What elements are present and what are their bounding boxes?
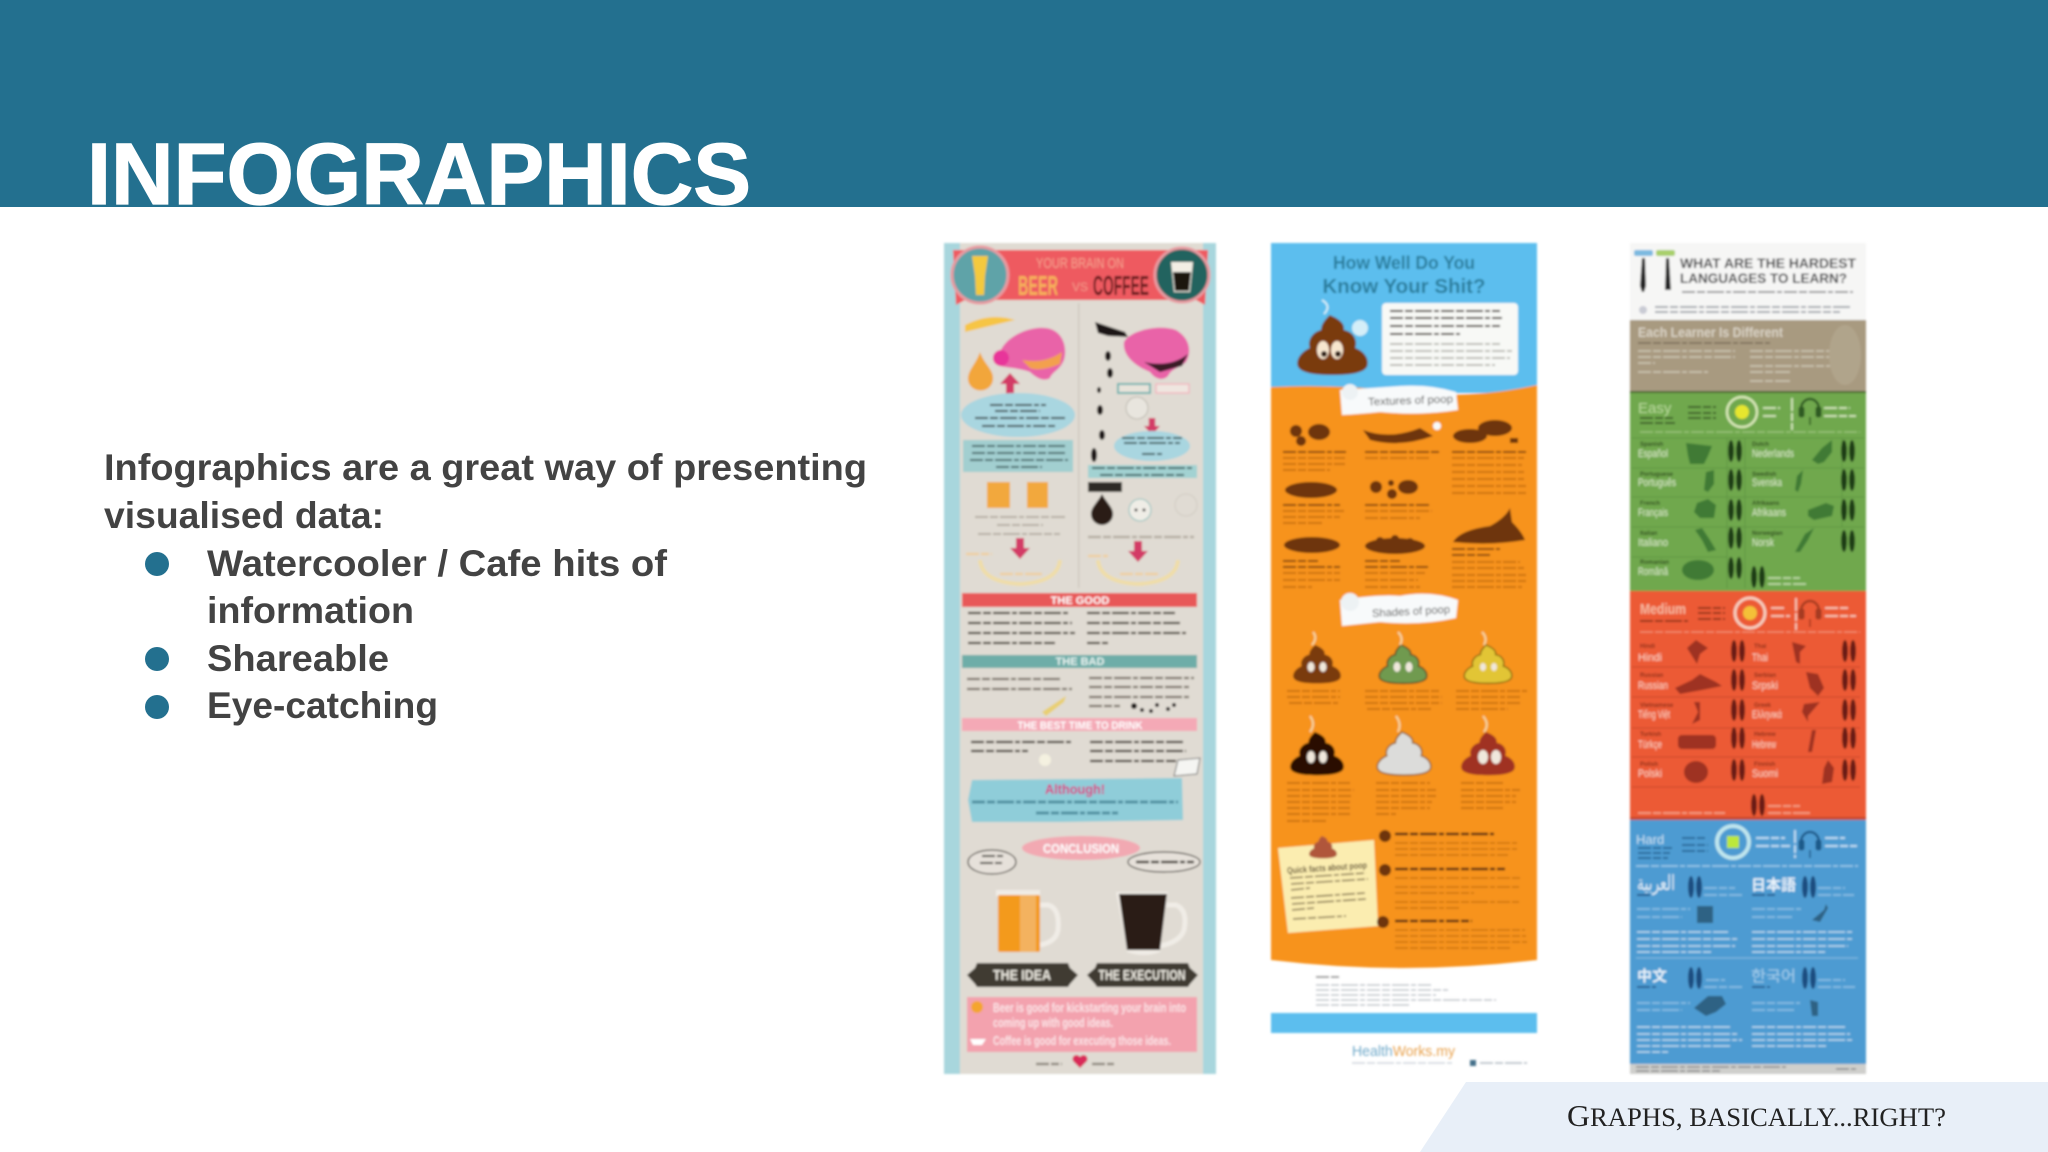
- medium rows: Ελληνικά: [1752, 709, 1782, 721]
- texture captions: [1283, 452, 1527, 587]
- medium rows: Thai: [1754, 644, 1767, 650]
- coffee side: drop, face and result: [1088, 482, 1197, 584]
- medium rows: Turkish: [1640, 732, 1662, 738]
- easy rows: Português: [1638, 477, 1676, 489]
- beer side: mugs and result: [966, 482, 1065, 584]
- credit strip: [1630, 1064, 1866, 1074]
- medium rows: Russian: [1640, 673, 1664, 679]
- sources: [1316, 977, 1496, 1005]
- japanese: [1751, 874, 1854, 952]
- medium rows: Hindi: [1638, 652, 1662, 664]
- easy rows: French: [1640, 501, 1660, 507]
- textures grid: [1284, 420, 1525, 554]
- easy rows: Norwegian: [1752, 531, 1783, 537]
- easy header: [1638, 397, 1860, 432]
- text block: intro and bullet list: [104, 447, 867, 726]
- easy rows: Dutch: [1752, 442, 1769, 448]
- texture row 3: [1284, 508, 1525, 554]
- icon: big poop mascot: [1297, 300, 1368, 375]
- title: INFOGRAPHICS: [87, 126, 751, 223]
- medium header: Medium: [1640, 601, 1686, 618]
- korean: [1751, 965, 1855, 1046]
- conclusion panel: Beer is good for kickstarting your brain into: [993, 1000, 1186, 1015]
- speech bubble: beer: [968, 850, 1016, 874]
- chinese: 中文: [1637, 965, 1667, 986]
- easy rows: [1632, 438, 1864, 588]
- medium rows: Serbian: [1754, 673, 1776, 679]
- coffee side: brain and drips: [1091, 322, 1189, 462]
- section: the bad: THE BAD: [1056, 656, 1104, 668]
- title: [1322, 253, 1486, 298]
- icons: header people: [1634, 250, 1675, 292]
- panel: hardest languages infographic: [1630, 243, 1866, 1074]
- banner: your brain on beer vs coffee: BEER: [1018, 270, 1058, 301]
- panel: know your shit infographic: [1271, 243, 1537, 1066]
- hard header: Hard: [1636, 832, 1664, 847]
- heading: shades of poop: Shades of poop: [1372, 604, 1450, 620]
- hard header: [1636, 826, 1858, 866]
- logo: healthworks.my: HealthWorks.my: [1352, 1043, 1455, 1060]
- medium header: [1640, 598, 1860, 632]
- section: each learner is different: Each Learner Is Different: [1638, 324, 1783, 340]
- intro sentence: [104, 447, 867, 536]
- japanese: 日本語: [1751, 874, 1796, 895]
- texture row 1: [1290, 420, 1518, 446]
- bullet: watercooler: Watercooler / Cafe hits of: [207, 543, 668, 584]
- medium rows: Tiếng Việt: [1638, 709, 1670, 721]
- banner: your brain on beer vs coffee: YOUR BRAIN ON: [1036, 255, 1124, 272]
- beer side: teal note: [963, 440, 1073, 472]
- intro sentence: Infographics are a great way of presenting: [104, 447, 867, 488]
- section: medium languages: [1630, 591, 1866, 820]
- title: LANGUAGES TO LEARN?: [1680, 270, 1847, 286]
- medium rows: [1632, 640, 1860, 816]
- easy rows: Spanish: [1640, 442, 1664, 448]
- section: each learner is different: [1630, 320, 1866, 391]
- footer logo: [1036, 1055, 1114, 1068]
- conclusion panel: coming up with good ideas.: [993, 1015, 1113, 1030]
- arabic: [1637, 872, 1742, 952]
- coffee side: labels and explanation: [1088, 384, 1197, 478]
- easy rows: Swedish: [1752, 472, 1777, 478]
- coffee mug: [1116, 892, 1185, 955]
- title: Know Your Shit?: [1322, 276, 1486, 298]
- easy rows: Italiano: [1638, 537, 1668, 549]
- subtitle and note: [1639, 292, 1853, 314]
- conclusion panel: [967, 997, 1197, 1052]
- easy rows: Français: [1638, 507, 1668, 519]
- ribbon: the execution: [1087, 963, 1198, 987]
- banner: your brain on beer vs coffee: VS: [1072, 280, 1088, 294]
- footer tab: [1420, 1082, 2048, 1152]
- korean: 한국어: [1751, 965, 1796, 986]
- ribbon: the idea: THE IDEA: [993, 967, 1051, 984]
- easy rows: Română: [1638, 566, 1669, 578]
- easy rows: Nederlands: [1752, 448, 1794, 460]
- arabic: العربية: [1637, 872, 1675, 896]
- banner: your brain on beer vs coffee: [952, 247, 1209, 305]
- medium rows: Polski: [1638, 768, 1662, 780]
- conclusion heading: CONCLUSION: [1043, 841, 1119, 856]
- intro sentence: visualised data:: [104, 495, 384, 536]
- panel: beer vs coffee infographic: [944, 243, 1216, 1074]
- section: the good: THE GOOD: [1051, 595, 1109, 607]
- medium rows: Vietnamese: [1640, 703, 1674, 709]
- section: the bad: [962, 655, 1197, 716]
- easy rows: Norsk: [1752, 537, 1774, 549]
- medium rows: Hebrew: [1752, 739, 1776, 751]
- section: easy languages: [1630, 391, 1866, 591]
- bullet: shareable: Shareable: [207, 638, 389, 679]
- poop shades row 2: [1290, 716, 1515, 775]
- easy rows: Afrikaans: [1752, 501, 1780, 507]
- easy rows: Svenska: [1752, 477, 1783, 489]
- callout: although: [968, 778, 1183, 822]
- beer mug: [996, 890, 1058, 952]
- heading: textures of poop: [1340, 384, 1458, 415]
- bullet: watercooler: information: [207, 590, 414, 631]
- note: quick facts about poop: Quick facts about poop: [1287, 860, 1368, 876]
- poop shades row 1: [1293, 632, 1512, 683]
- medium rows: Suomi: [1752, 768, 1778, 780]
- header band: [0, 0, 2048, 207]
- medium rows: Russian: [1638, 680, 1668, 692]
- beer side: brain and drop: [965, 317, 1065, 394]
- ribbon: the execution: THE EXECUTION: [1098, 967, 1186, 984]
- texture row 2: [1285, 480, 1418, 499]
- footer caption: GRAPHS, BASICALLY...RIGHT?: [1567, 1098, 1946, 1133]
- section: the good: [962, 593, 1197, 643]
- title: WHAT ARE THE HARDEST: [1680, 255, 1856, 271]
- easy rows: Español: [1638, 448, 1668, 460]
- banner: your brain on beer vs coffee: COFFEE: [1093, 270, 1149, 301]
- medium rows: Polish: [1640, 762, 1658, 768]
- medium rows: Srpski: [1752, 680, 1778, 692]
- bullet: eye-catching: Eye-catching: [207, 685, 438, 726]
- chinese: [1637, 965, 1742, 1052]
- title: [1680, 255, 1856, 286]
- heading: textures of poop: Textures of poop: [1368, 394, 1453, 408]
- beer side: explanation ellipse: [961, 393, 1075, 437]
- callout: although: Although!: [1045, 781, 1105, 797]
- heading: shades of poop: [1340, 593, 1458, 626]
- logo: healthworks.my: [1352, 1043, 1527, 1066]
- ribbon: the idea: [967, 963, 1078, 987]
- bullet: watercooler: [145, 543, 668, 631]
- section: the best time to drink: [962, 718, 1200, 776]
- speech bubble: coffee: [1128, 852, 1200, 872]
- medium rows: Hindi: [1640, 644, 1655, 650]
- medium rows: Thai: [1752, 652, 1768, 664]
- easy rows: Afrikaans: [1752, 507, 1786, 519]
- shade captions: [1287, 691, 1527, 821]
- medium rows: Hebrew: [1754, 732, 1776, 738]
- blue footer band: [1271, 1013, 1537, 1033]
- conclusion heading: [1022, 836, 1140, 860]
- section: the best time to drink: THE BEST TIME TO DRINK: [1018, 720, 1143, 732]
- note: quick facts about poop: [1278, 836, 1378, 933]
- intro text box: [1382, 303, 1518, 375]
- easy rows: Portuguese: [1640, 472, 1674, 478]
- easy rows: Italian: [1640, 531, 1658, 537]
- easy header: Easy: [1638, 400, 1672, 417]
- medium rows: Türkçe: [1638, 739, 1662, 751]
- medium rows: Greek: [1754, 703, 1772, 709]
- medium rows: Finnish: [1754, 762, 1776, 768]
- section: hard languages: [1630, 820, 1866, 1064]
- conclusion panel: Coffee is good for executing those ideas.: [993, 1033, 1171, 1048]
- title: How Well Do You: [1333, 253, 1475, 273]
- easy rows: Romanian: [1640, 560, 1669, 566]
- faq text: [1377, 830, 1527, 948]
